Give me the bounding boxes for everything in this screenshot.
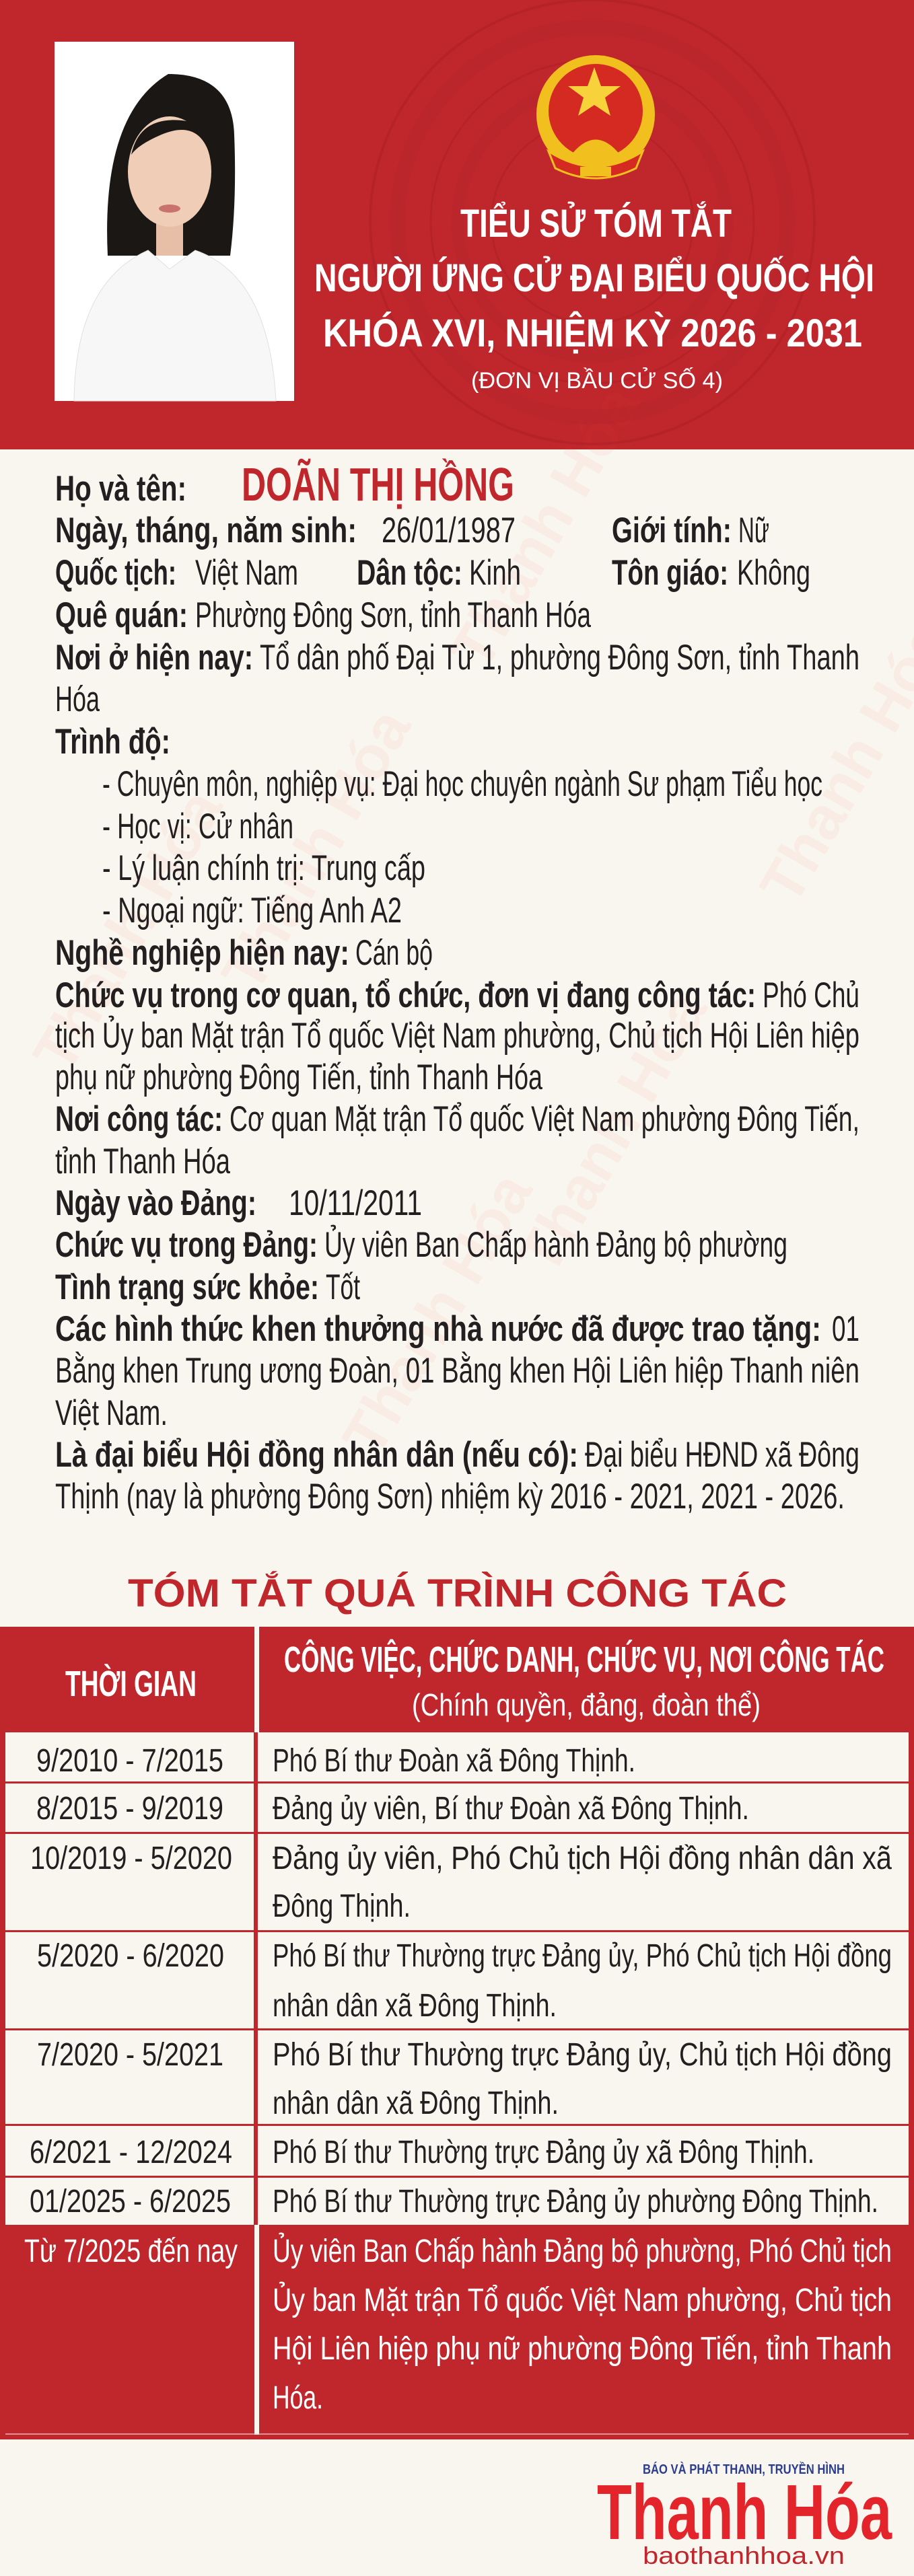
- personal info text block: Việt Nam.: [55, 1393, 168, 1433]
- table rows: Đảng ủy viên, Bí thư Đoàn xã Đông Thịnh.: [273, 1791, 749, 1827]
- table header: [65, 1639, 884, 1722]
- personal info text block: tỉnh Thanh Hóa: [55, 1142, 230, 1181]
- table header: THỜI GIAN: [65, 1664, 197, 1704]
- personal info text block: 26/01/1987: [382, 511, 516, 550]
- personal info text block: Là đại biểu Hội đồng nhân dân (nếu có):: [55, 1435, 578, 1475]
- footer logo: baothanhhoa.vn: [643, 2542, 845, 2569]
- personal info text block: phụ nữ phường Đông Tiến, tỉnh Thanh Hóa: [55, 1058, 542, 1097]
- personal info text block: Nghề nghiệp hiện nay:: [55, 933, 349, 973]
- name line: [55, 458, 514, 511]
- title: [314, 202, 874, 355]
- personal info text block: Quốc tịch:: [55, 553, 176, 593]
- personal info text block: Chức vụ trong Đảng:: [55, 1225, 318, 1265]
- personal info text block: Hóa: [55, 679, 100, 719]
- watermarks: Thanh Hóa: [505, 980, 720, 1285]
- personal info text block: Phường Đông Sơn, tỉnh Thanh Hóa: [195, 595, 591, 635]
- personal info text block: Tốt: [326, 1267, 360, 1307]
- table rows: 7/2020 - 5/2021: [37, 2037, 223, 2073]
- personal info text block: - Ngoại ngữ: Tiếng Anh A2: [102, 891, 402, 930]
- table rows: Đông Thịnh.: [273, 1888, 411, 1924]
- watermarks: Thanh Hóa: [330, 1161, 545, 1467]
- personal info text block: - Học vị: Cử nhân: [102, 807, 293, 846]
- personal info text block: Nơi công tác:: [55, 1099, 223, 1139]
- personal info text block: Nơi ở hiện nay:: [55, 638, 253, 677]
- personal info text block: Việt Nam: [195, 553, 298, 593]
- footer logo: BÁO VÀ PHÁT THANH, TRUYỀN HÌNH: [643, 2462, 845, 2477]
- personal info text block: 01: [832, 1309, 859, 1349]
- personal info text block: Nữ: [738, 511, 769, 550]
- watermarks: [21, 374, 914, 1467]
- name line: DOÃN THỊ HỒNG: [242, 458, 514, 511]
- header panel: [0, 0, 914, 449]
- watermarks: Thanh Hóa: [21, 778, 236, 1083]
- personal info text block: Ngày vào Đảng:: [55, 1183, 256, 1223]
- watermarks: Thanh Hóa: [209, 697, 424, 1002]
- personal info text block: Dân tộc:: [357, 553, 462, 593]
- table rows: [24, 1743, 892, 2416]
- name line: Họ và tên:: [55, 469, 186, 509]
- table rows: 01/2025 - 6/2025: [30, 2184, 231, 2219]
- table rows: Hóa.: [273, 2380, 323, 2416]
- section heading: TÓM TẮT QUÁ TRÌNH CÔNG TÁC: [128, 1572, 787, 1615]
- personal info text block: Trình độ:: [55, 722, 170, 762]
- personal info text block: Tình trạng sức khỏe:: [55, 1267, 319, 1307]
- personal info text block: Kinh: [469, 553, 521, 593]
- table rows: 8/2015 - 9/2019: [36, 1791, 223, 1827]
- photo: [55, 42, 294, 401]
- personal info text block: [55, 458, 859, 1516]
- table rows: 9/2010 - 7/2015: [36, 1743, 223, 1779]
- personal info text block: Không: [737, 553, 810, 593]
- table rows: Phó Bí thư Đoàn xã Đông Thịnh.: [273, 1743, 635, 1779]
- personal info text block: Phó Chủ: [763, 976, 859, 1015]
- table rows: 10/2019 - 5/2020: [30, 1841, 232, 1876]
- table rows: Từ 7/2025 đến nay: [24, 2234, 238, 2269]
- watermarks: Thanh Hóa: [438, 374, 653, 679]
- table rows: 6/2021 - 12/2024: [30, 2135, 232, 2170]
- title: TIỂU SỬ TÓM TẮT: [460, 202, 732, 246]
- personal info text block: Cán bộ: [355, 933, 433, 973]
- subtitle: (ĐƠN VỊ BẦU CỬ SỐ 4): [471, 367, 723, 394]
- table header: (Chính quyền, đảng, đoàn thể): [412, 1687, 761, 1722]
- personal info text block: - Lý luận chính trị: Trung cấp: [102, 848, 425, 888]
- personal info text block: 10/11/2011: [289, 1183, 422, 1223]
- table: work history: [0, 1627, 914, 2439]
- personal info text block: Quê quán:: [55, 595, 188, 635]
- table rows: 5/2020 - 6/2020: [37, 1938, 224, 1974]
- personal info text block: Tôn giáo:: [612, 553, 728, 593]
- table rows: nhân dân xã Đông Thịnh.: [273, 2086, 559, 2121]
- personal info text block: Giới tính:: [612, 511, 732, 550]
- icon: national emblem: [536, 55, 655, 178]
- personal info text block: Ngày, tháng, năm sinh:: [55, 511, 357, 550]
- table rows: nhân dân xã Đông Thịnh.: [273, 1988, 557, 2024]
